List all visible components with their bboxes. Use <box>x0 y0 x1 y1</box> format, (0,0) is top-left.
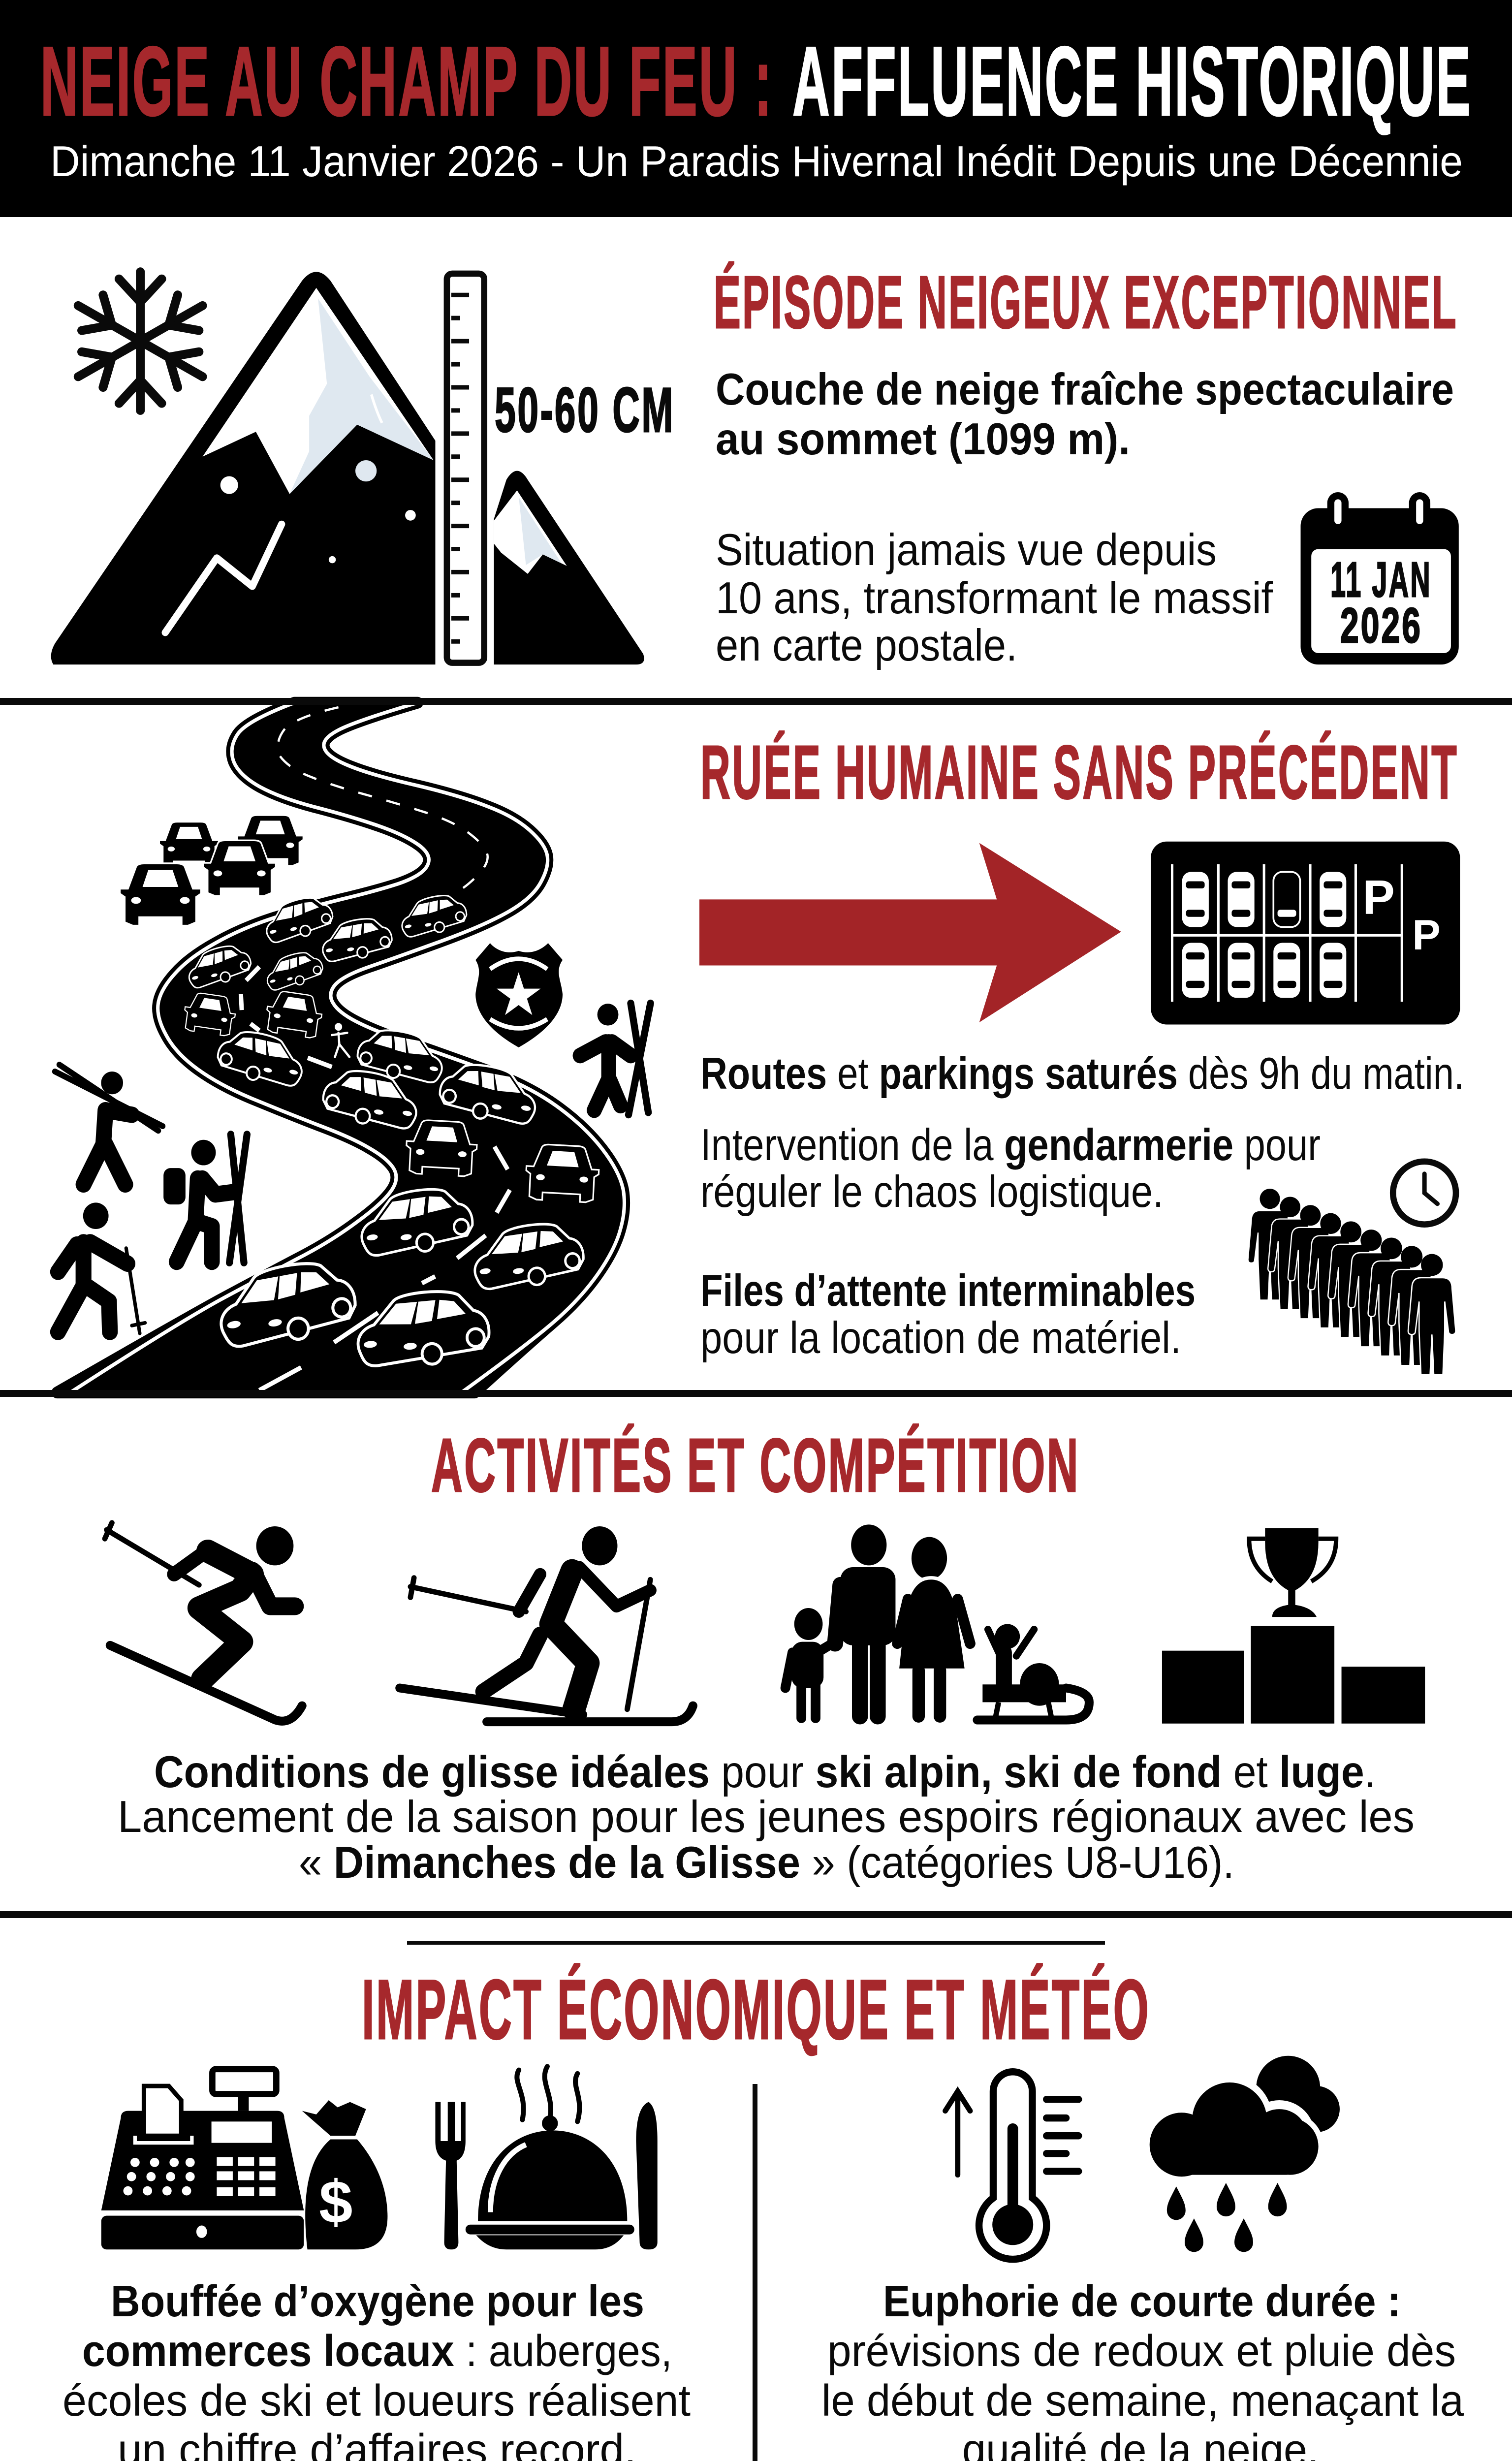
text: snow layer: au sommet (1099 m). <box>716 414 1130 464</box>
divider lines <box>0 698 1512 1945</box>
panel: human rush <box>55 703 1464 1392</box>
icon: small snowy mountain <box>494 471 644 664</box>
icon: skier with poles right <box>580 1003 651 1115</box>
text: activities description: Conditions de glisse idéales pour ski alpin, ski de fond et luge. <box>154 1747 1376 1797</box>
text: local businesses: commerces locaux : auberges, <box>82 2327 672 2376</box>
icon: full parking lot: P <box>1362 870 1395 924</box>
small pedestrian on road <box>332 1024 349 1057</box>
icon: calendar: 11 JAN <box>1330 552 1432 607</box>
text: snow layer: Couche de neige fraîche spectaculaire <box>716 365 1454 414</box>
cars queued on road <box>182 890 600 1371</box>
icon: big snowy mountain <box>51 272 435 664</box>
text: never seen <box>716 525 1273 670</box>
text: activities description <box>118 1747 1415 1888</box>
icon: thermometer <box>945 2072 1078 2259</box>
icon: full parking lot: P <box>1412 912 1441 959</box>
icon: skier with backpack <box>163 1135 247 1263</box>
column divider <box>753 2084 757 2461</box>
text: short-lived euphoria <box>821 2277 1464 2461</box>
icon: cross-country skier <box>400 1526 693 1722</box>
icon: snowflake <box>78 272 203 410</box>
icon: skier carrying skis <box>55 1065 162 1184</box>
icon: family with sled <box>786 1524 1089 1720</box>
icon: hiker with stick <box>58 1202 145 1333</box>
text: short-lived euphoria: prévisions de redoux et pluie dès <box>827 2327 1456 2376</box>
icon: alpine skier <box>105 1523 302 1721</box>
text: gendarmerie <box>700 1120 1321 1217</box>
panel: snow episode <box>51 260 1459 670</box>
text: local businesses <box>63 2277 691 2461</box>
text: gendarmerie: Intervention de la gendarmerie pour <box>700 1120 1321 1170</box>
icon: calendar <box>1301 492 1459 664</box>
text: short-lived euphoria: le début de semaine, menaçant la <box>821 2376 1464 2426</box>
icon: waiting cars <box>120 815 303 926</box>
icon: snow ruler <box>447 274 484 663</box>
panel: activities and competition <box>105 1423 1425 1888</box>
text: queues: pour la location de matériel. <box>700 1313 1181 1363</box>
arrow to parking <box>699 843 1121 1022</box>
text: queues: Files d’attente interminables <box>700 1266 1196 1316</box>
icon: cash register <box>101 2069 304 2249</box>
text: activities description: Lancement de la saison pour les jeunes espoirs régionaux avec les <box>118 1792 1415 1842</box>
text: never seen: Situation jamais vue depuis <box>716 525 1217 575</box>
text: never seen: 10 ans, transformant le massif <box>716 573 1273 623</box>
text: local businesses: Bouffée d’oxygène pour les <box>111 2277 644 2326</box>
text: snow layer <box>716 365 1454 464</box>
panel: economy and weather <box>63 1962 1464 2461</box>
icon: trophy on podium <box>1162 1528 1425 1724</box>
text: activities description: « Dimanches de la Glisse » (catégories U8-U16). <box>299 1838 1234 1888</box>
icon: money bag <box>302 2100 387 2249</box>
text: saturated roads: Routes et parkings saturés dès 9h du matin. <box>700 1049 1464 1099</box>
title: NEIGE AU CHAMP DU FEU : <box>40 27 773 136</box>
icon: fork, cloche and knife <box>435 2066 658 2249</box>
icon: rain clouds <box>1144 2056 1340 2252</box>
text: never seen: en carte postale. <box>716 621 1017 670</box>
text: gendarmerie: réguler le chaos logistique. <box>700 1167 1164 1217</box>
text: local businesses: écoles de ski et loueurs réalisent <box>63 2376 691 2426</box>
text: short-lived euphoria: Euphorie de courte durée : <box>883 2277 1401 2326</box>
icon: calendar: 2026 <box>1340 598 1422 653</box>
panel: header banner <box>0 0 1512 217</box>
icon: waiting line of people <box>1248 1189 1456 1375</box>
icon: gendarmerie badge <box>475 943 563 1047</box>
road with traffic jam <box>57 703 624 1392</box>
icon: full parking lot <box>1151 842 1460 1025</box>
text: queues <box>700 1266 1196 1363</box>
icon: clock <box>1393 1162 1456 1225</box>
icon: money bag: $ <box>319 2169 352 2236</box>
subtitle: Dimanche 11 Janvier 2026 - Un Paradis Hivernal Inédit Depuis une Décennie <box>50 137 1463 186</box>
measurement label: 50-60 CM <box>495 375 675 445</box>
